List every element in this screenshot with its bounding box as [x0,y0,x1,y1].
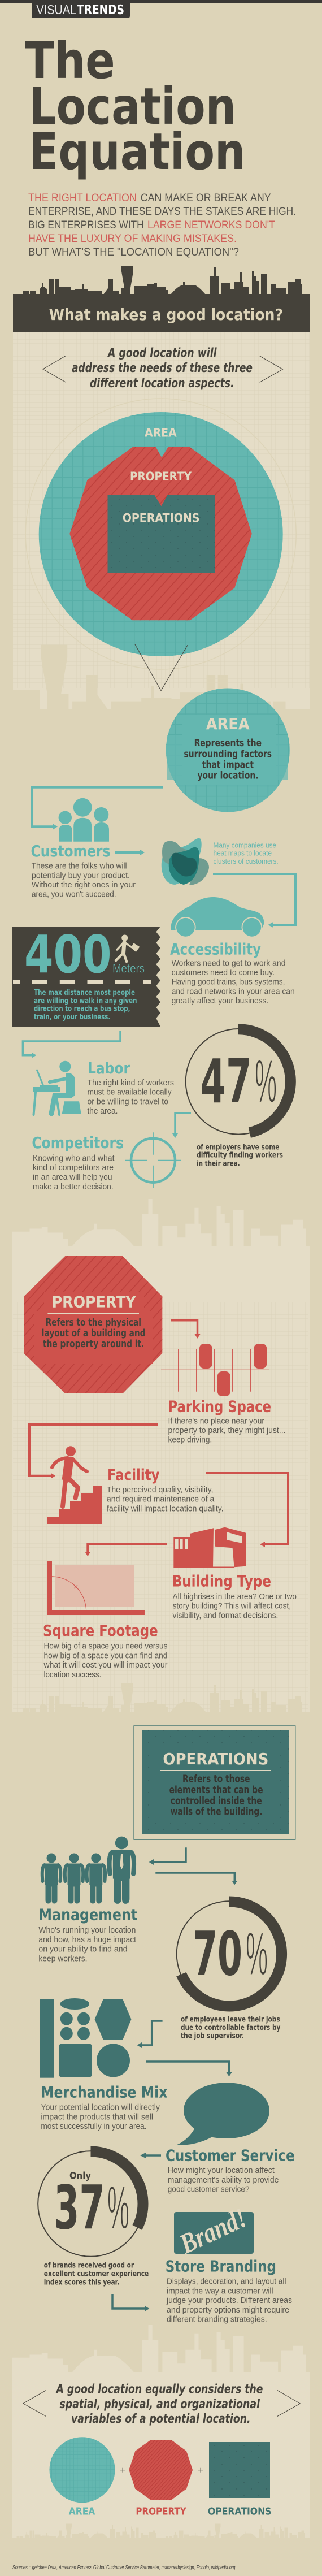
title [25,31,245,181]
donut chart: 47% [186,1029,291,1135]
merchandise mix text: Merchandise Mix [41,2083,167,2102]
icon: car [171,897,264,938]
panel: 400 meters [12,924,160,1027]
donut chart: 37%: Only [69,2170,91,2181]
intro text [28,192,296,258]
building type text: All highrises in the area? One or two [173,1592,297,1601]
arrow: customers to heat map [115,850,145,855]
heat map note: clusters of customers. [214,857,279,865]
labor text: Labor [88,1059,130,1077]
arrow: management to 70% [155,1873,237,1885]
customers text: Customers [31,842,111,860]
logo: Visual Trends: TRENDS [77,3,124,18]
37% caption: excellent customer experience [44,2270,149,2279]
panel: property background [0,1196,310,1712]
store branding text: Displays, decoration, and layout all [167,2277,286,2287]
property octagon: PROPERTY [52,1292,136,1311]
facility text: Facility [107,1465,159,1484]
facility text: facility will impact location quality. [107,1504,224,1513]
intro text: LARGE NETWORKS DON'T [147,219,275,231]
labels [123,426,200,525]
donut chart: 37% [38,2151,143,2257]
labor text: The right kind of workers [87,1078,174,1088]
property octagon: layout of a building and [42,1328,146,1339]
panel: conclusion [0,2322,310,2538]
icon: walking man [116,935,140,962]
47% caption: in their area. [197,1159,240,1168]
icon: labor [33,1061,81,1115]
panel: three aspects [0,332,310,709]
building type text: story building? This will affect cost, [173,1601,291,1611]
operations box [134,1726,295,1839]
panel: 400 meters: The max distance most people [34,989,135,997]
intro text: ENTERPRISE, AND THESE DAYS THE STAKES ARE HIGH. [28,206,296,218]
square footage text: what it will cost you will impact your [43,1660,167,1670]
equation: area: AREA [69,2505,95,2517]
section: area intro circle: AREA [206,715,250,733]
operations box: controlled inside the [171,1795,262,1807]
competitors text: kind of competitors are [33,1163,114,1172]
icon: merchandise shapes [40,1998,131,2078]
operations box: Refers to those [182,1774,250,1785]
donut chart: 37%: 37 [54,2174,105,2244]
building type text: visibility, and format decisions. [173,1610,278,1620]
panel: 400 meters: 400 [24,924,112,985]
accessibility text: Accessibility [170,940,261,958]
donut chart: 70%: 70 [193,1919,242,1989]
mini skyline [17,2523,305,2538]
outer ring [25,399,296,669]
road dashes [13,980,151,984]
title: Location [29,77,236,136]
accessibility text: Workers need to get to work and [172,958,286,968]
icon: crosshair [125,1132,181,1188]
donut chart: 47%: 47 [200,1047,252,1117]
heading band [13,294,310,332]
operations box: walls of the building. [171,1806,262,1817]
47% caption: difficulty finding workers [197,1151,283,1160]
management text: Management [38,1906,137,1924]
arrow: 70% to merchandise [137,2021,163,2048]
section: area intro circle: Represents the [194,738,262,749]
chevrons: conclusion [23,2390,300,2417]
down chevron [135,644,188,691]
square footage text: Square Footage [43,1621,158,1640]
donut chart: 70%: % [246,1919,268,1988]
merchandise mix text: impact the products that will sell [41,2112,153,2122]
intro text: HAVE THE LUXURY OF MAKING MISTAKES. [28,233,237,245]
70% caption [181,2016,281,2041]
heat map note: Many companies use [214,841,276,849]
labor text [87,1059,174,1116]
panel: 400 meters: are willing to walk in any given [34,997,137,1005]
property octagon: the property around it. [43,1339,144,1350]
arrow: heat map to accessibility [213,874,295,928]
parking space text [168,1397,286,1445]
equation: operations: OPERATIONS [208,2505,271,2517]
building type text: Building Type [172,1572,271,1591]
management text [38,1906,137,1964]
building type text [172,1572,297,1620]
icon: customers [59,798,109,842]
operations square [107,495,215,573]
intro text: BUT WHAT'S THE "LOCATION EQUATION"? [28,246,239,258]
customers text: potentialy buy your product. [32,871,130,880]
square footage text: how big of a space you can find and [44,1651,167,1660]
icon: heat map blob [162,838,209,885]
operations box: elements that can be [169,1785,263,1796]
skyline: header [23,266,302,295]
conclusion statement: A good location equally considers the [55,2382,263,2396]
management text: Who's running your location [38,1925,136,1935]
customers text: Without the right ones in your [32,880,136,890]
customer service text [166,2146,295,2194]
70% caption: due to controllable factors by [181,2024,281,2032]
heat map note [214,841,279,865]
arrow: area to customers [32,787,163,830]
square footage text: How big of a space you need versus [44,1642,167,1651]
icon: square footage [47,1561,145,1615]
parking space text: Parking Space [168,1397,271,1416]
competitors text: make a better decision. [33,1182,114,1192]
intro statement: A good location will [107,347,217,361]
customer service text: good customer service? [168,2184,250,2194]
title: Equation [29,122,245,181]
square footage text [43,1621,167,1679]
property octagon [24,1256,162,1393]
labels: OPERATIONS [123,512,200,525]
facility text: and required maintenance of a [107,1495,215,1504]
equation: area [50,2437,115,2517]
arrow: customer service to 37% [140,2153,161,2158]
equation: operations [208,2442,271,2517]
customers text: area, you won't succeed. [32,890,116,899]
competitors text: in an area will help you [33,1172,112,1182]
merchandise mix text [41,2083,167,2131]
merchandise mix text: Your potential location will directly [41,2103,160,2112]
icon: building [173,1527,246,1568]
store branding text: different branding strategies. [167,2314,267,2324]
section: area intro circle: your location. [198,770,259,782]
labels: AREA [145,426,177,439]
arrow: property to parking [171,1321,200,1339]
icon: facility stairs [47,1446,102,1524]
arrow: 37% to store branding [112,2294,149,2311]
conclusion statement: spatial, physical, and organizational [60,2397,260,2412]
panel: 400 meters: direction to reach a bus stop, [34,1005,130,1014]
property octagon: Refers to the physical [46,1317,141,1328]
donut chart: 47%: % [255,1047,277,1115]
conclusion statement: variables of a potential location. [71,2412,251,2426]
chevrons [43,356,282,382]
facility text: The perceived quality, visibility, [107,1485,214,1495]
management text: and how, has a huge impact [38,1935,137,1945]
equation: property: PROPERTY [136,2505,187,2517]
accessibility text: and road networks in your area can [172,986,295,996]
intro text: BIG ENTERPRISES WITH [28,219,143,231]
management text: keep workers. [38,1954,87,1964]
70% caption: of employees leave their jobs [181,2016,280,2024]
intro text: THE RIGHT LOCATION [28,192,137,204]
icon: management [42,1837,134,1903]
heading band: What makes a good location? [49,305,283,324]
donut chart: 37%: % [107,2174,129,2242]
intro statement: address the needs of these three [72,361,253,375]
customer service text: Customer Service [166,2146,295,2164]
icon: speech bubble [177,2083,269,2145]
intro statement: different location aspects. [90,376,234,391]
accessibility text: greatly affect your business. [172,996,268,1006]
arrow: operations to management [149,1847,186,1865]
operations box: OPERATIONS [163,1750,268,1768]
accessibility text: customers need to come buy. [172,968,275,977]
customer service text: How might your location affect [168,2166,275,2175]
icon: parking lot [161,1344,269,1396]
store branding text: judge your products. Different areas [166,2296,292,2305]
labor text: the area. [87,1106,118,1116]
arrow: parking to facility [29,1425,158,1479]
title: The [25,31,115,90]
accessibility text [170,940,295,1006]
labor text: or be willing to travel to [87,1097,168,1106]
plus sign [120,2468,203,2473]
37% caption [44,2262,149,2287]
logo: Visual Trends: VISUAL [36,2,77,17]
arrow: merchandise to customer service [146,2062,232,2076]
competitors text [32,1133,124,1192]
skyline cut-out [0,645,285,709]
conclusion statement [55,2382,263,2426]
47% caption [197,1143,283,1168]
customers text: These are the folks who will [32,861,127,871]
parking space text: property to park, they might just... [168,1426,286,1435]
panel: 400 meters: train, or your business. [34,1013,110,1021]
37% caption: of brands received good or [44,2262,134,2270]
icon: brand sign: Brand! [174,2201,251,2260]
competitors text: Knowing who and what [33,1153,115,1163]
arrow: building to square footage [85,1544,167,1556]
heat map note: heat maps to locate [214,849,272,858]
sources: Sources :: getchee Data, American Express Global Customer Service Barometer, managerbydesign, Fonolo, wikipedia.org [12,2565,236,2571]
section: area intro circle: surrounding factors [184,748,272,760]
intro statement [72,347,253,391]
area circle [39,412,283,656]
arrow: 400 meters to labor [23,1031,120,1058]
47% caption: of employers have some [197,1143,280,1151]
70% caption: the job supervisor. [181,2032,244,2041]
37% caption: index scores this year. [44,2278,119,2287]
parking space text: If there's no place near your [168,1416,264,1426]
logo: Visual Trends [32,2,130,18]
merchandise mix text: most successfully in your area. [41,2122,147,2131]
store branding text: Store Branding [166,2257,276,2275]
facility text [107,1465,224,1513]
arrow: facility to building [206,1473,288,1547]
customers text [31,842,136,899]
parking space text: keep driving. [168,1435,212,1445]
accessibility text: Having good trains, bus systems, [172,977,285,987]
equation: property [129,2440,193,2517]
donut chart: 70% [177,1901,282,2007]
intro text: CAN MAKE OR BREAK ANY [141,192,271,204]
square footage text: location success. [44,1670,101,1679]
panel: 400 meters: Meters [112,962,145,976]
management text: on your ability to find and [38,1945,128,1954]
store branding text: impact the way a customer will [167,2286,273,2296]
labor text: must be available locally [87,1088,172,1097]
property decagon [69,447,252,620]
store branding text [166,2257,292,2324]
section: area intro circle [166,689,290,812]
top bar [0,0,322,3]
customer service text: management's ability to provide [168,2175,279,2185]
section: area intro circle: that impact [202,759,254,770]
labels: PROPERTY [130,470,192,483]
store branding text: and property options might require [167,2305,289,2315]
arrow: 47% to competitors [172,1113,191,1138]
competitors text: Competitors [32,1133,124,1152]
